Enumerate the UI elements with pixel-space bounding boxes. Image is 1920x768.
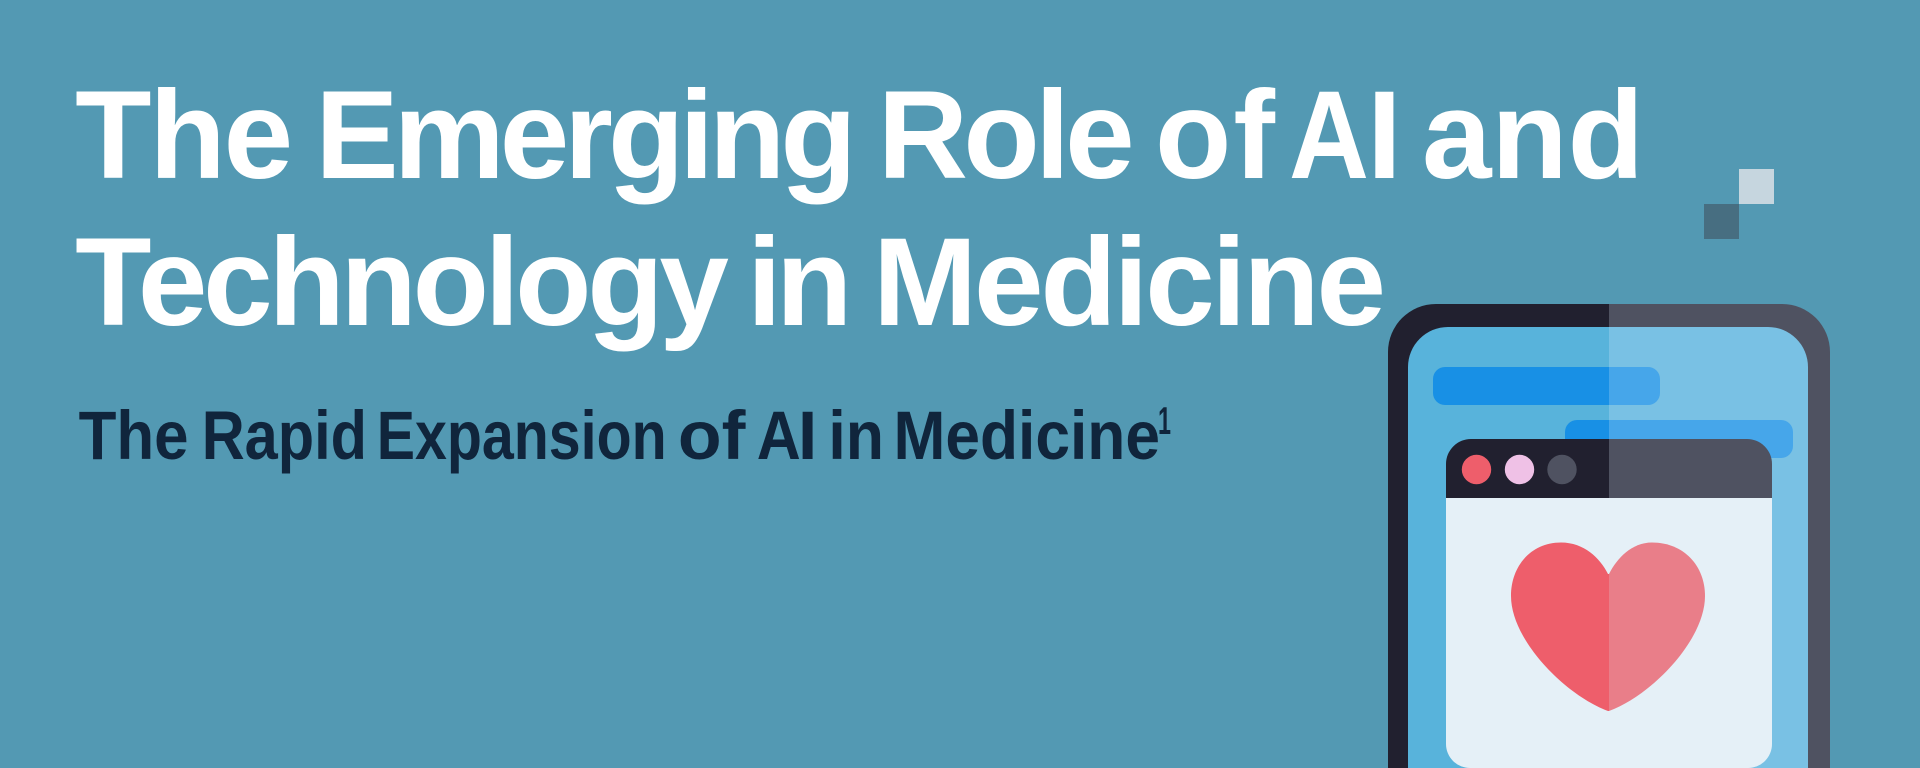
title: Role xyxy=(878,66,1135,205)
window body xyxy=(1446,498,1772,768)
title: I xyxy=(1367,66,1402,205)
subtitle: I xyxy=(798,397,817,474)
icon: smartphone with health app xyxy=(1388,304,1830,768)
title: and xyxy=(1422,66,1644,205)
title: Medicine xyxy=(873,213,1386,352)
subtitle: of xyxy=(678,397,747,474)
subtitle: in xyxy=(828,397,884,474)
title: of xyxy=(1155,66,1275,205)
subtitle: Rapid xyxy=(202,397,367,474)
subtitle: 1 xyxy=(1158,400,1171,443)
message bar 1 xyxy=(1433,367,1660,405)
subtitle: Expansion xyxy=(377,397,667,474)
phone body xyxy=(1388,304,1830,768)
title: Emerging xyxy=(315,66,857,205)
icon: heart xyxy=(1511,542,1705,711)
app window xyxy=(1446,439,1772,768)
icon: decorative squares xyxy=(1704,169,1774,239)
title: A xyxy=(1289,66,1369,205)
subtitle: Medicine xyxy=(894,397,1160,474)
subtitle: The xyxy=(79,397,189,474)
subtitle: A xyxy=(757,397,801,474)
message bar 2 xyxy=(1565,420,1793,458)
subtitle xyxy=(79,397,1171,474)
phone screen xyxy=(1408,327,1808,768)
title: in xyxy=(747,213,852,352)
title: The xyxy=(75,66,293,205)
title xyxy=(75,66,1644,352)
window buttons xyxy=(1462,455,1577,484)
window title bar xyxy=(1446,439,1772,498)
title: Technology xyxy=(75,213,729,352)
